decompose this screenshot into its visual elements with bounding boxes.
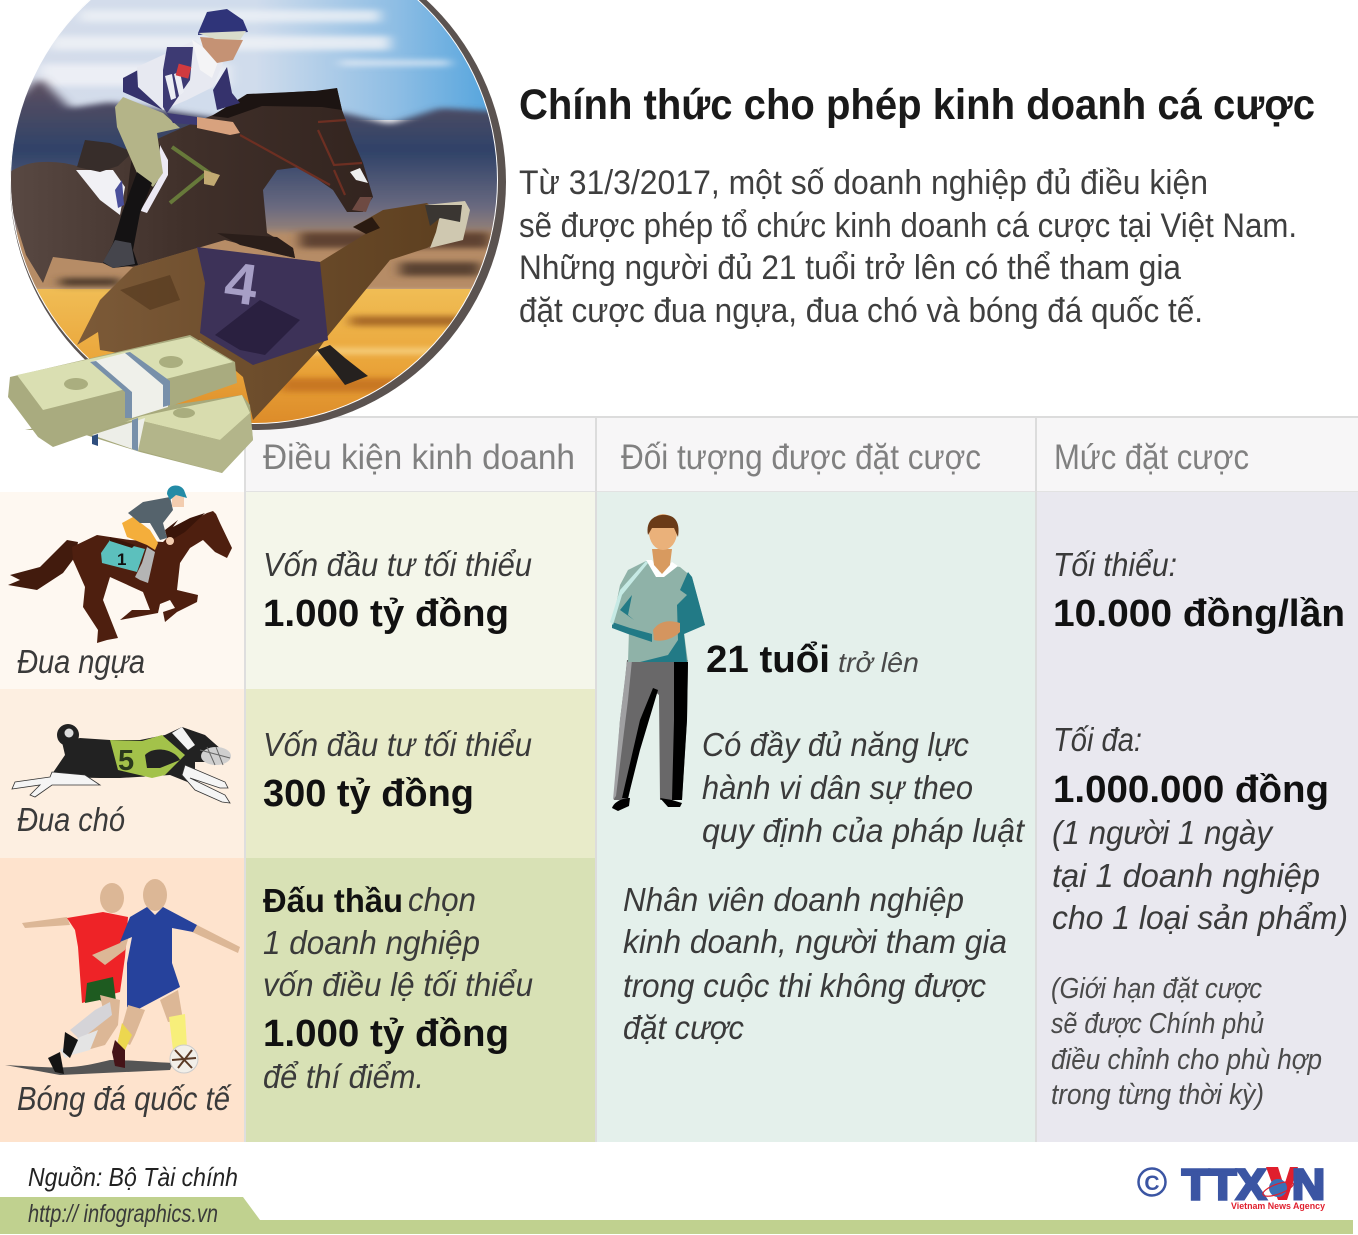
column headers: Đối tượng được đặt cược xyxy=(621,438,981,477)
column: business conditions: Vốn đầu tư tối thiểu xyxy=(263,726,532,763)
intro text: đặt cược đua ngựa, đua chó và bóng đá quốc tế. xyxy=(519,292,1203,330)
icon: racing dog: 5 xyxy=(118,745,134,777)
column: betting limits: (Giới hạn đặt cược xyxy=(1051,973,1262,1005)
column headers: Điều kiện kinh doanh xyxy=(263,438,575,477)
logo: TTXVN: TTX xyxy=(1182,1161,1266,1209)
label: international football: Bóng đá quốc tế xyxy=(17,1080,232,1117)
icon: racing dog xyxy=(12,724,231,803)
column: business conditions: 300 tỷ đồng xyxy=(263,773,474,815)
column: eligible bettors: hành vi dân sự theo xyxy=(702,769,973,806)
logo: TTXVN xyxy=(1138,1161,1325,1211)
intro text: Những người đủ 21 tuổi trở lên có thể tham gia xyxy=(519,249,1181,287)
horse xyxy=(0,88,373,283)
icon: jockey on horse: 1 xyxy=(117,550,126,569)
column: eligible bettors: 21 tuổi xyxy=(706,639,830,681)
column: betting limits: tại 1 doanh nghiệp xyxy=(1052,857,1320,894)
icon: banknote stacks xyxy=(8,335,253,473)
icon: jockey on horse xyxy=(8,485,232,643)
column: betting limits: trong từng thời kỳ) xyxy=(1051,1079,1264,1111)
column: eligible bettors: Nhân viên doanh nghiệp xyxy=(623,881,964,918)
rider xyxy=(103,9,248,268)
intro text: Từ 31/3/2017, một số doanh nghiệp đủ điều kiện xyxy=(519,164,1208,202)
logo: TTXVN: C xyxy=(1144,1172,1160,1195)
column headers xyxy=(263,438,1249,477)
column: betting limits: Tối thiểu: xyxy=(1053,546,1177,583)
column: eligible bettors: đặt cược xyxy=(623,1009,744,1046)
intro text: sẽ được phép tổ chức kinh doanh cá cược tại Việt Nam. xyxy=(519,207,1297,245)
column: betting limits: điều chỉnh cho phù hợp xyxy=(1051,1044,1322,1076)
logo: TTXVN: N xyxy=(1292,1161,1325,1209)
column: eligible bettors: kinh doanh, người tham gia xyxy=(623,923,1007,960)
dog number 4: 4 xyxy=(221,250,262,318)
column: betting limits: sẽ được Chính phủ xyxy=(1051,1008,1264,1040)
column: business conditions: 1.000 tỷ đồng xyxy=(263,1013,509,1055)
column: betting limits: cho 1 loại sản phẩm) xyxy=(1052,899,1348,936)
panel: table backgrounds xyxy=(0,416,1358,1142)
column: business conditions: vốn điều lệ tối thiểu xyxy=(263,966,533,1003)
title: Chính thức cho phép kinh doanh cá cược xyxy=(519,81,1315,129)
column: betting limits: 10.000 đồng/lần xyxy=(1053,593,1345,635)
photo circle: horse and greyhound racing xyxy=(0,0,510,439)
label: dog racing: Đua chó xyxy=(17,801,125,838)
website text: http:// infographics.vn xyxy=(28,1200,218,1228)
column: business conditions: 1 doanh nghiệp xyxy=(263,924,480,961)
column: eligible bettors: trở lên xyxy=(838,647,919,678)
greyhound xyxy=(77,201,470,420)
icon: standing man xyxy=(610,514,705,811)
column: betting limits xyxy=(1051,546,1348,1111)
icon: football players xyxy=(5,879,240,1075)
source text: Nguồn: Bộ Tài chính xyxy=(28,1162,238,1192)
column: business conditions: để thí điểm. xyxy=(263,1058,424,1095)
column: betting limits: (1 người 1 ngày xyxy=(1052,814,1274,851)
column: eligible bettors xyxy=(623,639,1026,1046)
footer band xyxy=(0,1197,1353,1234)
column: betting limits: 1.000.000 đồng xyxy=(1053,769,1329,811)
intro text xyxy=(519,164,1297,330)
column: eligible bettors: trong cuộc thi không được xyxy=(623,967,986,1004)
column: business conditions xyxy=(263,546,533,1095)
column: eligible bettors: quy định của pháp luật xyxy=(702,812,1026,849)
column headers: Mức đặt cược xyxy=(1054,438,1249,477)
column: business conditions: Vốn đầu tư tối thiểu xyxy=(263,546,532,583)
column: business conditions: Đấu thầu xyxy=(263,882,403,919)
saddle and pad xyxy=(76,140,220,215)
label: horse racing: Đua ngựa xyxy=(17,643,145,680)
column: business conditions: chọn xyxy=(408,881,476,918)
column: business conditions: 1.000 tỷ đồng xyxy=(263,593,509,635)
column: betting limits: Tối đa: xyxy=(1053,721,1142,758)
logo: TTXVN: Vietnam News Agency xyxy=(1231,1201,1325,1211)
column: eligible bettors: Có đầy đủ năng lực xyxy=(702,726,969,763)
